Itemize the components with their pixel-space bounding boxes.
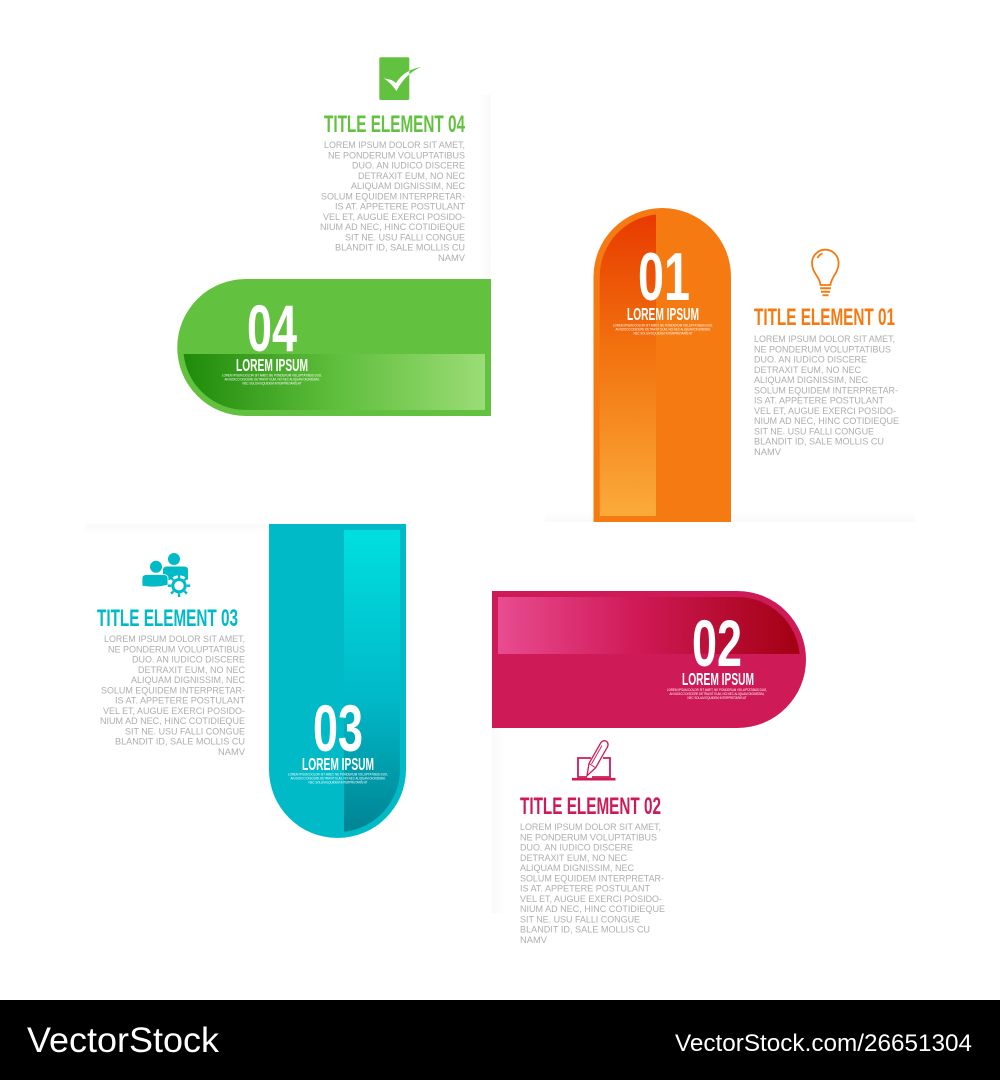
body text 04: ALIQUAM DIGNISSIM, NEC: [351, 181, 465, 191]
title 02: TITLE ELEMENT 02: [520, 793, 661, 820]
footer image id: VectorStock.com/26651304: [675, 1030, 972, 1057]
green tab inner gradient: [184, 354, 485, 410]
body text 02: SIT NE. USU FALLI CONGUE: [520, 914, 640, 924]
teal tab shape: [269, 524, 406, 838]
body text 01: NAMV: [754, 447, 782, 457]
label lorem ipsum 02: LOREM IPSUM: [682, 669, 754, 689]
body text 04: DETRAXIT EUM, NO NEC: [358, 171, 465, 181]
body text 02: VEL ET, AUGUE EXERCI POSIDO-: [520, 894, 662, 904]
title 03: TITLE ELEMENT 03: [97, 605, 238, 632]
footer logo text: VectorStock: [27, 1021, 220, 1060]
tiny text 01: AN IUDICO DISCERE DETRAXIT EUM, NO NEC ALIQUAM DIGNISSIM,: [616, 328, 710, 332]
body text 04: BLANDIT ID, SALE MOLLIS CU: [335, 243, 465, 253]
body text 01: SOLUM EQUIDEM INTERPRETAR-: [754, 385, 898, 395]
body text 02: ALIQUAM DIGNISSIM, NEC: [520, 863, 634, 873]
orange tab shape: [594, 208, 731, 522]
body text 04: DUO. AN IUDICO DISCERE: [352, 160, 465, 170]
tiny text 01: LOREM IPSUM DOLOR SIT AMET, NE PONDERUM VOLUPTATIBUS DUO,: [613, 324, 713, 328]
body text 03: LOREM IPSUM DOLOR SIT AMET,: [104, 634, 245, 644]
body text 01: NE PONDERUM VOLUPTATIBUS: [754, 344, 891, 354]
body text 01: SIT NE. USU FALLI CONGUE: [754, 426, 874, 436]
body text 04: SOLUM EQUIDEM INTERPRETAR-: [321, 191, 465, 201]
tiny text 04: AN IUDICO DISCERE DETRAXIT EUM, NO NEC ALIQUAM DIGNISSIM,: [224, 378, 320, 382]
green tab shape: [177, 279, 491, 416]
pink tab inner gradient: [498, 597, 800, 654]
body text 02: SOLUM EQUIDEM INTERPRETAR-: [520, 873, 664, 883]
footer bar: [0, 1000, 1000, 1080]
body text 03: ALIQUAM DIGNISSIM, NEC: [131, 675, 245, 685]
number 02: 02: [692, 606, 742, 680]
teal tab inner gradient: [344, 530, 400, 832]
tiny text 03: LOREM IPSUM DOLOR SIT AMET, NE PONDERUM VOLUPTATIBUS DUO,: [288, 772, 388, 776]
label lorem ipsum 04: LOREM IPSUM: [236, 355, 308, 375]
panel: step 03 description: [97, 553, 246, 757]
tiny text 04: NEC SOLUM EQUIDEM INTERPRETARIS AT: [242, 382, 302, 386]
tiny text 01: [613, 324, 713, 336]
body text 04: VEL ET, AUGUE EXERCI POSIDO-: [323, 212, 465, 222]
body text 01: NIUM AD NEC, HINC COTIDIEQUE: [754, 416, 899, 426]
panel: step 04 description: [320, 57, 466, 263]
icon: people with gear: [142, 553, 190, 597]
body text 02: NIUM AD NEC, HINC COTIDIEQUE: [520, 904, 665, 914]
body text 03: NE PONDERUM VOLUPTATIBUS: [108, 644, 245, 654]
body text 04: IS AT. APPETERE POSTULANT: [335, 202, 465, 212]
body text 03: BLANDIT ID, SALE MOLLIS CU: [115, 737, 245, 747]
body text 02: DUO. AN IUDICO DISCERE: [520, 842, 633, 852]
tiny text 03: [288, 772, 388, 784]
body text 01: BLANDIT ID, SALE MOLLIS CU: [754, 437, 884, 447]
body text 01: DETRAXIT EUM, NO NEC: [754, 365, 861, 375]
panel: step 01 description: [754, 250, 899, 457]
title 01: TITLE ELEMENT 01: [754, 304, 895, 331]
body text 02: BLANDIT ID, SALE MOLLIS CU: [520, 925, 650, 935]
body text 03: NIUM AD NEC, HINC COTIDIEQUE: [100, 716, 245, 726]
body text 01: IS AT. APPETERE POSTULANT: [754, 396, 884, 406]
title 04: TITLE ELEMENT 04: [324, 111, 465, 138]
body text 02: NAMV: [520, 935, 548, 945]
tiny text 02: [667, 688, 767, 700]
panel: step 02 description: [520, 741, 665, 945]
body text 02: LOREM IPSUM DOLOR SIT AMET,: [520, 822, 661, 832]
tiny text 02: LOREM IPSUM DOLOR SIT AMET, NE PONDERUM VOLUPTATIBUS DUO,: [667, 688, 767, 692]
body text 03: [100, 634, 246, 757]
tiny text 03: AN IUDICO DISCERE DETRAXIT EUM, NO NEC ALIQUAM DIGNISSIM,: [290, 776, 386, 780]
tiny text 02: NEC SOLUM EQUIDEM INTERPRETARIS AT: [688, 696, 747, 700]
icon: pencil on laptop: [572, 741, 616, 779]
tiny text 02: AN IUDICO DISCERE DETRAXIT EUM, NO NEC ALIQUAM DIGNISSIM,: [670, 692, 764, 696]
body text 02: [520, 822, 665, 945]
body text 04: SIT NE. USU FALLI CONGUE: [345, 232, 465, 242]
body text 01: ALIQUAM DIGNISSIM, NEC: [754, 375, 868, 385]
body text 02: IS AT. APPETERE POSTULANT: [520, 884, 650, 894]
body text 03: IS AT. APPETERE POSTULANT: [115, 696, 245, 706]
tiny text 04: LOREM IPSUM DOLOR SIT AMET, NE PONDERUM VOLUPTATIBUS DUO,: [222, 374, 322, 378]
label lorem ipsum 03: LOREM IPSUM: [302, 754, 374, 774]
body text 04: LOREM IPSUM DOLOR SIT AMET,: [324, 140, 465, 150]
number 03: 03: [313, 691, 363, 765]
body text 03: VEL ET, AUGUE EXERCI POSIDO-: [103, 706, 245, 716]
body text 03: SOLUM EQUIDEM INTERPRETAR-: [101, 685, 245, 695]
pink tab shape: [492, 591, 806, 728]
body text 03: SIT NE. USU FALLI CONGUE: [125, 726, 245, 736]
body text 01: LOREM IPSUM DOLOR SIT AMET,: [754, 334, 895, 344]
panel: step 03 teal tab: [269, 524, 406, 838]
orange tab inner gradient: [600, 214, 656, 516]
panel: step 02 pink tab: [492, 591, 806, 728]
body text 02: DETRAXIT EUM, NO NEC: [520, 853, 627, 863]
icon: light bulb: [812, 250, 839, 295]
body text 04: NE PONDERUM VOLUPTATIBUS: [328, 150, 465, 160]
number 04: 04: [247, 291, 297, 365]
body text 01: VEL ET, AUGUE EXERCI POSIDO-: [754, 406, 896, 416]
tiny text 03: NEC SOLUM EQUIDEM INTERPRETARIS AT: [308, 780, 368, 784]
body text 03: NAMV: [218, 747, 246, 757]
tiny text 01: NEC SOLUM EQUIDEM INTERPRETARIS AT: [634, 332, 693, 336]
icon: checkmark card: [379, 57, 421, 100]
number 01: 01: [638, 239, 690, 315]
body text 03: DUO. AN IUDICO DISCERE: [132, 654, 245, 664]
body text 04: NAMV: [438, 253, 466, 263]
label lorem ipsum 01: LOREM IPSUM: [627, 304, 699, 324]
body text 04: NIUM AD NEC, HINC COTIDIEQUE: [320, 222, 465, 232]
tiny text 04: [222, 374, 322, 386]
body text 02: NE PONDERUM VOLUPTATIBUS: [520, 832, 657, 842]
body text 03: DETRAXIT EUM, NO NEC: [138, 665, 245, 675]
body text 01: [754, 334, 899, 457]
panel: step 04 green tab: [177, 279, 491, 416]
body text 01: DUO. AN IUDICO DISCERE: [754, 354, 867, 364]
body text 04: [320, 140, 466, 263]
panel: step 01 orange tab: [594, 208, 731, 522]
